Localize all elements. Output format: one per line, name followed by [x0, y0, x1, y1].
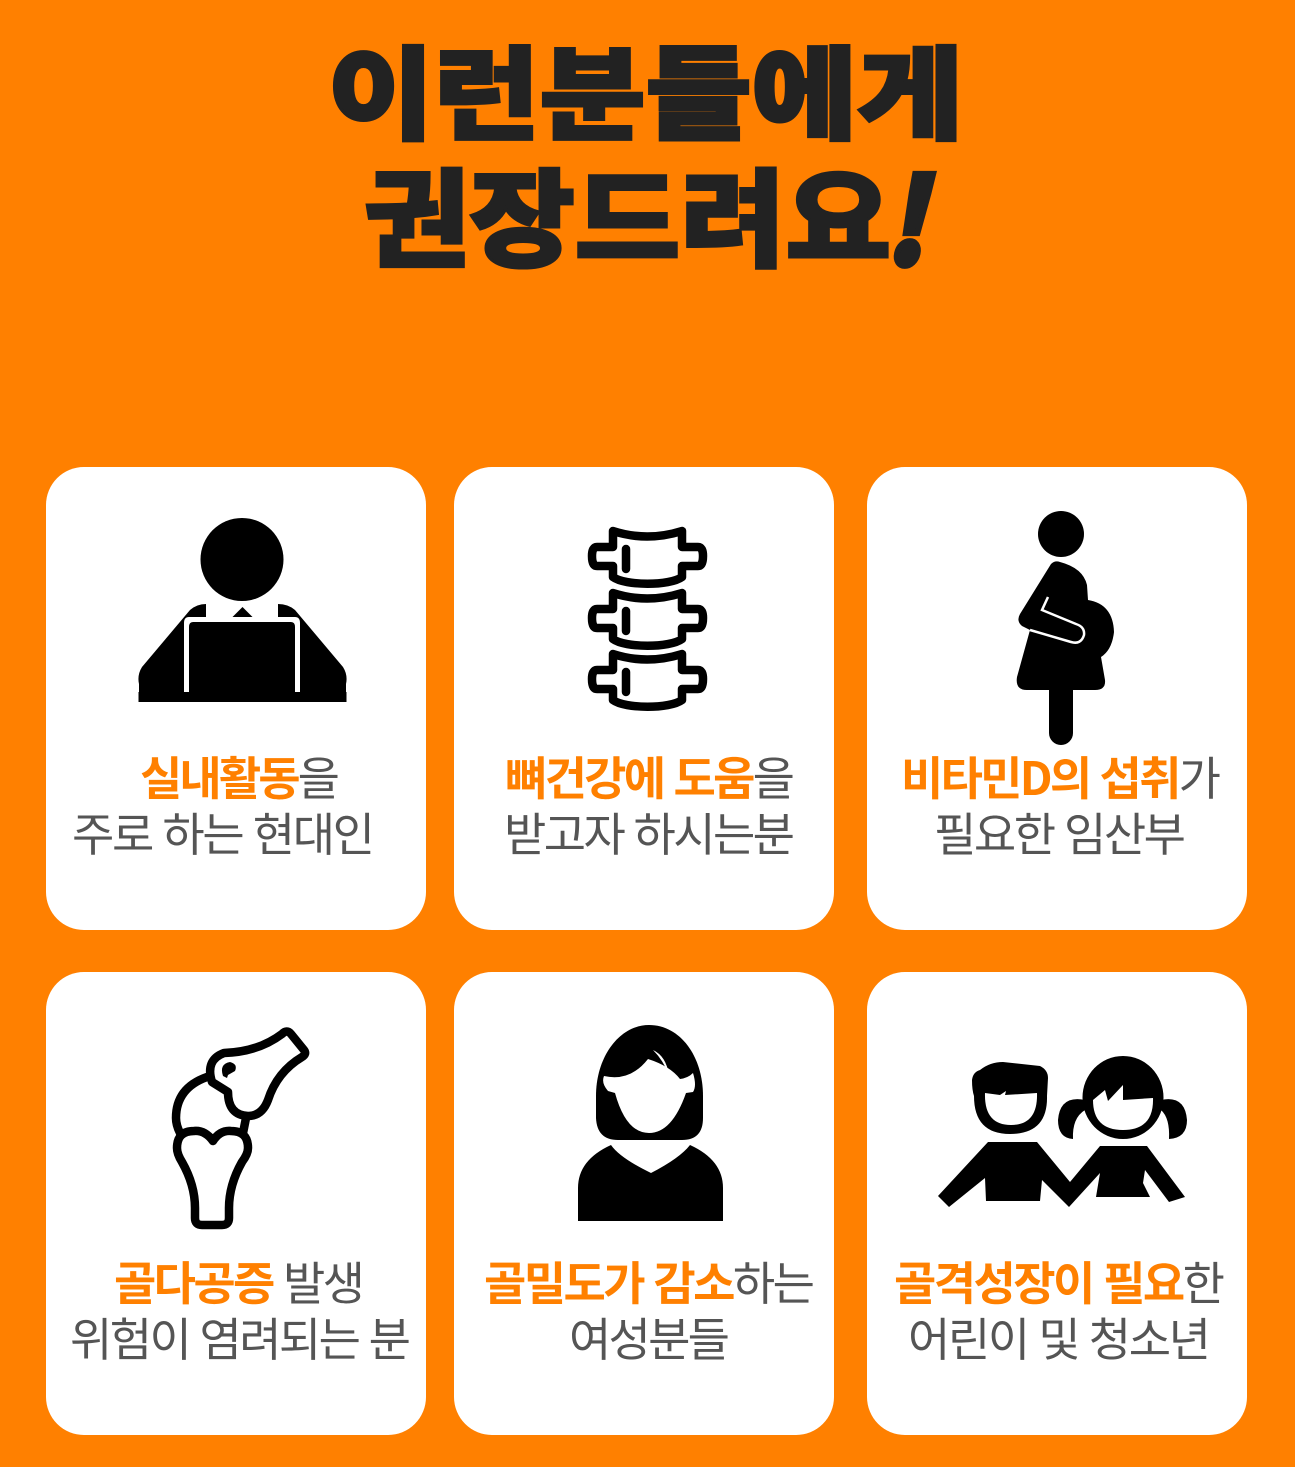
- panel: indoor workers: [46, 467, 426, 930]
- text: children and teens: [894, 1248, 1225, 1370]
- panel: osteoporosis risk: [46, 972, 426, 1435]
- text: women with low bone density: 골밀도가 감소하는: [484, 1248, 815, 1314]
- text: pregnant women: 비타민D의 섭취가: [901, 743, 1221, 809]
- panel: children and teens: [867, 972, 1247, 1435]
- text: women with low bone density: [484, 1248, 815, 1370]
- text: children and teens: 골격성장이 필요한: [894, 1248, 1225, 1314]
- title: [328, 15, 963, 298]
- title: 권장드려요: [364, 135, 891, 289]
- icon: person at laptop: [138, 518, 347, 702]
- icon: two children: [938, 1056, 1187, 1207]
- card background: [867, 467, 1247, 930]
- text: indoor workers: 실내활동을: [140, 743, 340, 809]
- icon: knee joint: [176, 1032, 305, 1225]
- text: bone health: 받고자 하시는분: [504, 799, 795, 865]
- text: osteoporosis risk: [70, 1248, 411, 1370]
- text: indoor workers: [72, 743, 375, 865]
- text: women with low bone density: 여성분들: [569, 1304, 730, 1370]
- card background: [867, 972, 1247, 1435]
- text: osteoporosis risk: 골다공증 발생: [114, 1248, 365, 1314]
- icon: spine: [592, 531, 703, 707]
- panel: pregnant women: [867, 467, 1247, 930]
- text: children and teens: 어린이 및 청소년: [908, 1304, 1211, 1370]
- panel: bone health: [454, 467, 834, 930]
- text: pregnant women: [901, 743, 1221, 865]
- title: 이런분들에게: [328, 15, 963, 161]
- panel: women with low bone density: [454, 972, 834, 1435]
- text: indoor workers: 주로 하는 현대인: [72, 799, 375, 865]
- title: !: [885, 127, 934, 298]
- text: bone health: [504, 743, 795, 865]
- icon: pregnant woman: [1017, 511, 1114, 745]
- text: bone health: 뼈건강에 도움을: [505, 743, 795, 809]
- card background: [46, 467, 426, 930]
- text: osteoporosis risk: 위험이 염려되는 분: [70, 1304, 411, 1370]
- icon: woman: [578, 1025, 723, 1221]
- card background: [46, 972, 426, 1435]
- card background: [454, 467, 834, 930]
- card background: [454, 972, 834, 1435]
- text: pregnant women: 필요한 임산부: [934, 799, 1186, 865]
